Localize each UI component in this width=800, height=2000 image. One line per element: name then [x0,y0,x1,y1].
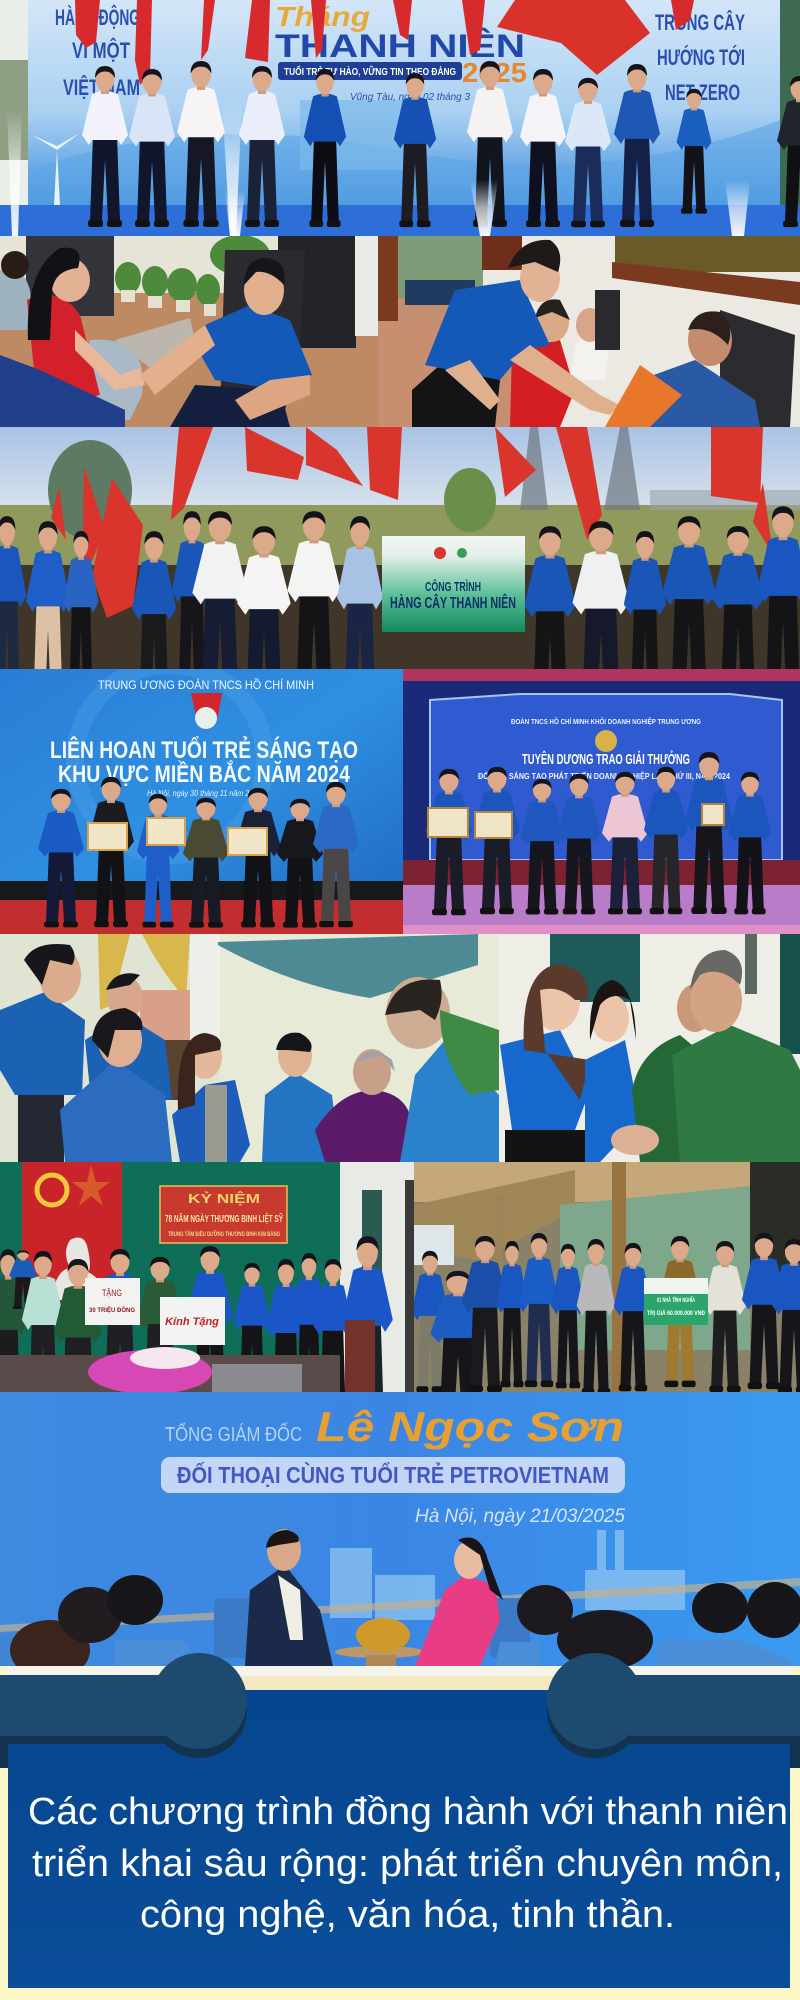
black armchair [720,310,795,427]
gift signboards [85,1278,225,1345]
text panel with scroll ribbon [0,1653,800,2000]
sign: Công trình Hàng cây Thanh niên: HÀNG CÂY THANH NIÊN [390,593,516,612]
speaker in dark suit [245,1529,333,1666]
photo: Tháng Thanh niên 2025 launch ceremony [0,0,800,236]
standing youth in blue [0,944,85,1162]
closing statement: Các chương trình đồng hành với thanh niên [28,1791,788,1833]
trees and pylons [48,427,800,540]
host in pink áo dài [415,1538,503,1666]
plants [115,235,270,306]
group of people [412,1233,800,1417]
audience heads and seats [0,1575,800,1680]
photo: Tuyên dương trao giải thưởng award stage [403,669,800,934]
backdrop lettering [161,1403,625,1527]
photo: handing over a gratitude house [414,1162,800,1392]
woman in red shirt [27,248,145,420]
photo: thanking a blood donor with flowers [378,236,800,427]
stage title: ĐỔI MỚI SÁNG TẠO PHÁT TRIỂN DOANH NGHIỆP LẦN THỨ III, NĂM 2024 [478,771,730,781]
wind turbine [32,133,80,205]
teal canopy [218,934,478,998]
banner: Kỷ niệm 78 năm: TRUNG TÂM ĐIỀU DƯỠNG THƯƠNG BINH KIM BẢNG [168,1231,280,1238]
gift signboards: 30 TRIỆU ĐỒNG [89,1306,135,1314]
blue armchairs [214,1598,254,1658]
man in blue giving flowers [412,240,620,427]
closing statement: triển khai sâu rộng: phát triển chuyên môn, [32,1843,783,1885]
orange bouquet [605,365,682,427]
flower table [335,1618,425,1666]
white bust [52,1238,101,1300]
stage title: TUYÊN DƯƠNG TRAO GIẢI THƯỞNG [522,750,690,768]
smiling veteran in green [672,950,800,1162]
backdrop lettering: 2025 [462,57,527,88]
award recipients [38,777,359,928]
green corrugated wall [560,1186,750,1350]
altar [140,990,190,1040]
seated man in glasses [262,1033,340,1162]
wall painting and wood rail [615,236,800,272]
backdrop lettering: Tháng [275,1,370,32]
seated young man [60,1008,172,1162]
photo: Hàng cây Thanh niên tree planting group [0,427,800,669]
gift signboards: Kính Tặng [165,1316,219,1328]
backdrop lettering: HƯỚNG TỚI [657,45,745,70]
backdrop lettering: NET ZERO [665,80,740,105]
blood supply table [115,318,195,368]
seated man in blue [630,311,760,427]
stage title [50,677,358,798]
back chairs [26,236,114,316]
handshake [611,1125,659,1155]
officials in a row [82,61,800,227]
banner: Kỷ niệm 78 năm [160,1186,287,1243]
backdrop lettering: Lê Ngọc Sơn [316,1403,624,1450]
photo: Lê Ngọc Sơn dialogue with Petrovietnam youth [0,1392,800,1666]
red flags [75,0,694,85]
foreground man from behind [385,977,499,1162]
donation sign: TRỊ GIÁ 60.000.000 VNĐ [647,1310,706,1317]
photo: gift presentation at Kim Bảng nursing centre [0,1162,414,1392]
backdrop lettering: VÌ MỘT [72,38,130,63]
red banners and flags [51,427,773,618]
backdrop lettering: Vũng Tàu, ngày 02 tháng 3 [350,92,470,103]
sign: Công trình Hàng cây Thanh niên: CÔNG TRÌNH [425,579,481,594]
table and flowers [0,1320,375,1394]
man in blue shirt [140,258,312,427]
boy in red [510,340,575,427]
backdrop lettering: HÀNH ĐỘNG [55,5,140,30]
gift signboards: TẶNG [102,1288,122,1298]
young woman in blue [500,964,590,1162]
backdrop lettering: TRỒNG CÂY [655,10,745,35]
sign: Công trình Hàng cây Thanh niên [382,536,525,632]
certificates [428,804,724,838]
yellow curtains [98,934,190,1010]
closing statement [28,1791,788,1936]
photo: Liên hoan Tuổi trẻ sáng tạo award stage [0,669,403,934]
backdrop lettering: TUỔI TRẺ TỰ HÀO, VỮNG TIN THEO ĐẢNG [284,65,456,78]
fireworks sparklers [7,100,750,236]
stage title: ĐOÀN TNCS HỒ CHÍ MINH KHỐI DOANH NGHIỆP TRUNG ƯƠNG [511,716,701,726]
seated woman [172,1033,250,1162]
refinery silhouette [330,1530,685,1620]
backdrop lettering: Hà Nội, ngày 21/03/2025 [415,1506,625,1527]
photo: visiting an elderly woman at home [0,934,499,1162]
blue chair [0,355,125,427]
closing statement: công nghệ, văn hóa, tinh thần. [140,1894,675,1936]
second veteran [632,984,713,1162]
stage title: TRUNG ƯƠNG ĐOÀN TNCS HỒ CHÍ MINH [98,677,314,692]
black recliner [220,250,305,410]
banner: Kỷ niệm 78 năm: KỶ NIỆM [188,1191,260,1206]
award recipients [426,752,771,915]
red flag with hammer and sickle and star [22,1162,122,1292]
photo: youth member donating blood [0,236,378,427]
stage title: Hà Nội, ngày 30 tháng 11 năm 2024 [147,789,261,798]
ribbon: right [547,1653,800,1768]
donation sign [644,1278,708,1325]
ribbon: left [0,1653,247,1768]
donation sign: 01 NHÀ TÌNH NGHĨA [657,1296,695,1304]
group of people [0,1236,393,1431]
back patient in white [570,331,610,380]
banner: Kỷ niệm 78 năm: 78 NĂM NGÀY THƯƠNG BINH LIỆT SỸ [165,1212,283,1225]
second young woman [585,980,640,1162]
volunteers group [0,506,800,712]
backdrop lettering: THANH NIÊN [275,28,525,64]
backdrop lettering: VIỆT NAM [63,75,140,100]
backdrop lettering: ĐỐI THOẠI CÙNG TUỔI TRẺ PETROVIETNAM [177,1460,609,1488]
photo: youth greeting a veteran [499,934,800,1162]
backdrop lettering: TỔNG GIÁM ĐỐC [165,1422,302,1446]
dark cabinet [278,236,356,348]
elderly woman in purple [315,1049,412,1162]
stage title [478,716,730,781]
backdrop lettering [55,1,745,105]
certificates [88,818,267,855]
plaid-shirt donor [0,268,35,330]
